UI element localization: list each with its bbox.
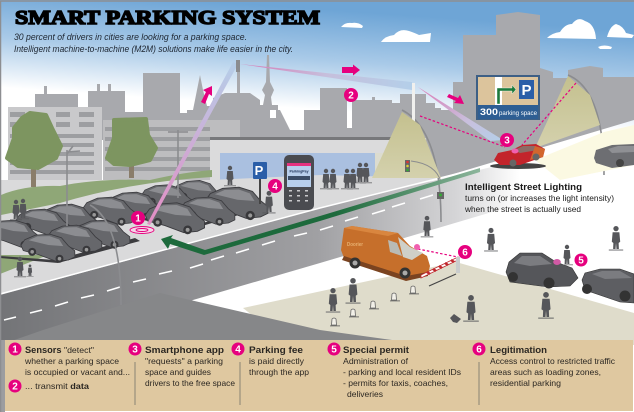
pink dashed links	[418, 83, 576, 257]
legend item 6: legitimation: residential parking	[490, 378, 561, 388]
signal mast	[236, 60, 240, 72]
legend item 5: special permit: - parking and local resident IDs	[343, 367, 461, 377]
parking sign: P	[255, 163, 264, 178]
legend item 5: special permit	[328, 342, 461, 399]
title: SMART PARKING SYSTEM	[15, 7, 320, 29]
grey suv and car	[506, 253, 634, 303]
parking sign	[253, 162, 267, 204]
numbered markers in the scene: 3	[504, 136, 510, 146]
text: intelligent street lighting	[464, 182, 614, 214]
parking guidance sign: 300	[480, 107, 498, 117]
grey car at right	[594, 144, 634, 168]
guidance beam	[418, 87, 503, 141]
legend item 3: smartphone app	[128, 342, 235, 388]
trees	[7, 113, 156, 187]
legend item 3: smartphone app: drivers to the free space	[145, 378, 235, 388]
text: intelligent street lighting: when the street is actually used	[464, 204, 581, 214]
subtitle: Intelligent machine-to-machine (M2M) solutions make life easier in the city.	[14, 44, 293, 54]
text: intelligent street lighting: turns on (or increases the light intensity)	[465, 193, 614, 203]
lamp light cones	[372, 76, 634, 180]
parking guidance sign: parking space	[499, 110, 537, 117]
office building with windows	[8, 107, 240, 180]
red car	[490, 144, 546, 169]
legend item 6: legitimation: Legitimation	[490, 345, 547, 356]
legend item 1 and 2: sensors: Sensors "detect"	[25, 345, 94, 355]
legend item 6: legitimation: 6	[476, 344, 482, 356]
grass and pavement	[0, 170, 440, 295]
traffic lights	[405, 160, 444, 199]
legend item 1 and 2: sensors: 2	[12, 382, 18, 392]
legend item 1 and 2: sensors: 1	[12, 344, 18, 356]
numbered markers in the scene	[131, 88, 588, 266]
legend item 3: smartphone app: "requests" a parking	[145, 356, 223, 366]
legend item 4: parking fee: Parking fee	[249, 345, 303, 356]
second mast	[412, 83, 415, 125]
clouds	[341, 19, 634, 49]
text: intelligent street lighting: Intelligent Street Lighting	[465, 182, 582, 193]
smartphone	[284, 155, 314, 210]
road edge line	[0, 168, 480, 294]
pedestrians	[10, 163, 623, 323]
numbered markers in the scene: 1	[135, 214, 141, 224]
parking guidance sign: P	[521, 82, 532, 99]
legend item 6: legitimation	[472, 342, 616, 388]
delivery van	[341, 226, 430, 281]
legend item 4: parking fee: through the app	[249, 367, 309, 377]
foreground roof	[0, 293, 392, 345]
bollards	[330, 286, 419, 326]
parked cars	[0, 177, 272, 265]
legend item 1 and 2: sensors	[8, 342, 130, 392]
legend item 3: smartphone app: 3	[132, 344, 138, 356]
sensor beam	[147, 62, 238, 225]
legend item 4: parking fee: 4	[235, 344, 241, 356]
subtitle	[14, 32, 293, 54]
lane markings	[4, 195, 433, 320]
sky background	[0, 0, 634, 130]
access barrier	[421, 257, 460, 286]
legend item 3: smartphone app: Smartphone app	[145, 345, 224, 356]
city skyline	[8, 12, 634, 178]
subtitle: 30 percent of drivers in cities are looking for a parking space.	[14, 32, 247, 42]
panel: legend	[0, 340, 633, 412]
legend item 1 and 2: sensors: whether a parking space	[24, 356, 119, 366]
legend item 1 and 2: sensors: is occupied or vacant and...	[25, 367, 130, 377]
legend item 4: parking fee	[232, 342, 309, 377]
legend item 5: special permit: Administration of	[343, 356, 409, 366]
legend item 3: smartphone app: space and guides	[145, 367, 211, 377]
legend item 5: special permit: 5	[331, 344, 337, 356]
delivery van: Doorier	[347, 242, 363, 248]
street lamps	[67, 75, 604, 305]
numbered markers in the scene: 6	[462, 248, 468, 258]
legend item 6: legitimation: areas such as loading zones,	[490, 367, 601, 377]
numbered markers in the scene: 4	[272, 182, 278, 192]
smartphone: ParkingPay	[289, 170, 309, 174]
green route arrow	[161, 168, 480, 255]
numbered markers in the scene: 5	[578, 256, 584, 266]
free parking sensor	[130, 226, 154, 234]
legend item 4: parking fee: is paid directly	[249, 356, 305, 366]
numbered markers in the scene: 2	[348, 90, 354, 102]
pink direction arrows	[201, 64, 464, 104]
legend item 5: special permit: - permits for taxis, coaches,	[343, 378, 448, 388]
shopping building	[210, 137, 426, 200]
beige plaza	[243, 262, 634, 345]
data beam	[240, 64, 412, 90]
legend item 5: special permit: Special permit	[343, 345, 410, 356]
parking guidance sign	[476, 75, 540, 120]
legend item 1 and 2: sensors: ... transmit data	[25, 381, 89, 391]
legend item 5: special permit: deliveries	[347, 389, 383, 399]
road	[0, 128, 634, 340]
legend item 6: legitimation: Access control to restricted traffic	[490, 356, 616, 366]
